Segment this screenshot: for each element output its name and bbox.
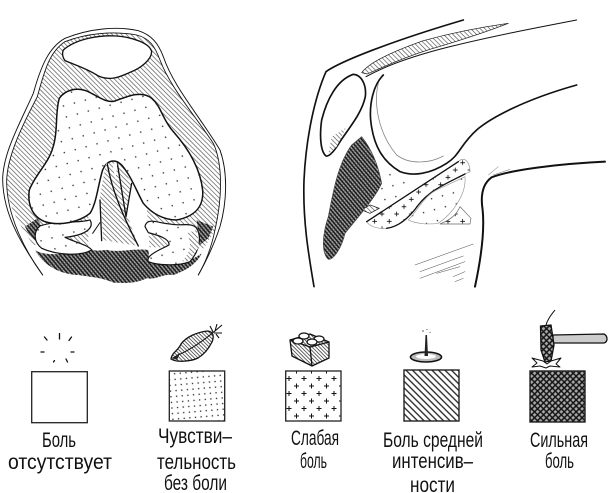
cruciate ligaments — [93, 163, 138, 246]
legend: sensitivity without pain — [157, 324, 236, 493]
label — [8, 429, 112, 474]
legend: mild pain — [286, 333, 341, 473]
infrapatellar fat pad — [323, 137, 382, 259]
box: pluses — [286, 371, 341, 421]
patella — [63, 36, 152, 78]
label — [530, 429, 588, 473]
label: Боль средней — [383, 429, 483, 452]
box: diagonal lines — [404, 370, 459, 421]
inner skin line — [7, 33, 221, 275]
left tibial condyle — [35, 220, 92, 254]
femur line — [370, 75, 577, 174]
quadriceps tendon — [362, 23, 508, 74]
dotted cartilage top — [377, 168, 418, 202]
front skin line — [304, 20, 463, 287]
box: dark crosshatch — [530, 371, 585, 422]
box: dots — [169, 371, 225, 421]
hatched soft tissue — [7, 33, 221, 248]
femur — [29, 89, 203, 224]
dotted tibial cartilage — [408, 177, 465, 224]
posterior skin line — [475, 162, 605, 287]
knee cross-section illustration — [3, 28, 226, 283]
icon: hammer — [532, 310, 607, 368]
label: отсутствует — [8, 451, 112, 474]
legend: severe pain — [530, 310, 607, 473]
calf marks — [415, 244, 473, 282]
plus triangle — [440, 207, 471, 224]
label: Слабая — [291, 427, 339, 450]
label — [291, 427, 339, 473]
femur inner shading — [376, 83, 443, 162]
icon: sparks — [41, 334, 74, 362]
right condyle hatching — [182, 230, 199, 262]
knee side-view illustration — [304, 20, 605, 287]
label: тельность — [157, 451, 236, 474]
small hatch element — [362, 205, 379, 213]
icon: toy brick — [290, 333, 329, 366]
legend: moderate pain — [383, 329, 483, 493]
upper thigh line — [366, 20, 577, 77]
right tibial condyle — [145, 221, 199, 265]
outer skin line — [3, 28, 226, 275]
dark tissue at the sides — [25, 218, 213, 245]
label: боль — [545, 450, 574, 473]
label — [383, 429, 483, 493]
box: empty — [32, 372, 87, 423]
label: боль — [300, 450, 327, 473]
intercondylar space — [88, 167, 150, 253]
icon: push pin — [410, 329, 442, 362]
label — [157, 425, 236, 493]
label: Боль — [42, 429, 76, 452]
label: интенсив– — [392, 450, 473, 473]
legend: no pain — [8, 334, 112, 474]
label: Чувстви– — [158, 425, 232, 448]
posterior dark tissue — [35, 248, 202, 283]
icon: feather — [171, 324, 222, 361]
meniscus band with pluses — [367, 159, 470, 229]
patella — [321, 74, 366, 156]
